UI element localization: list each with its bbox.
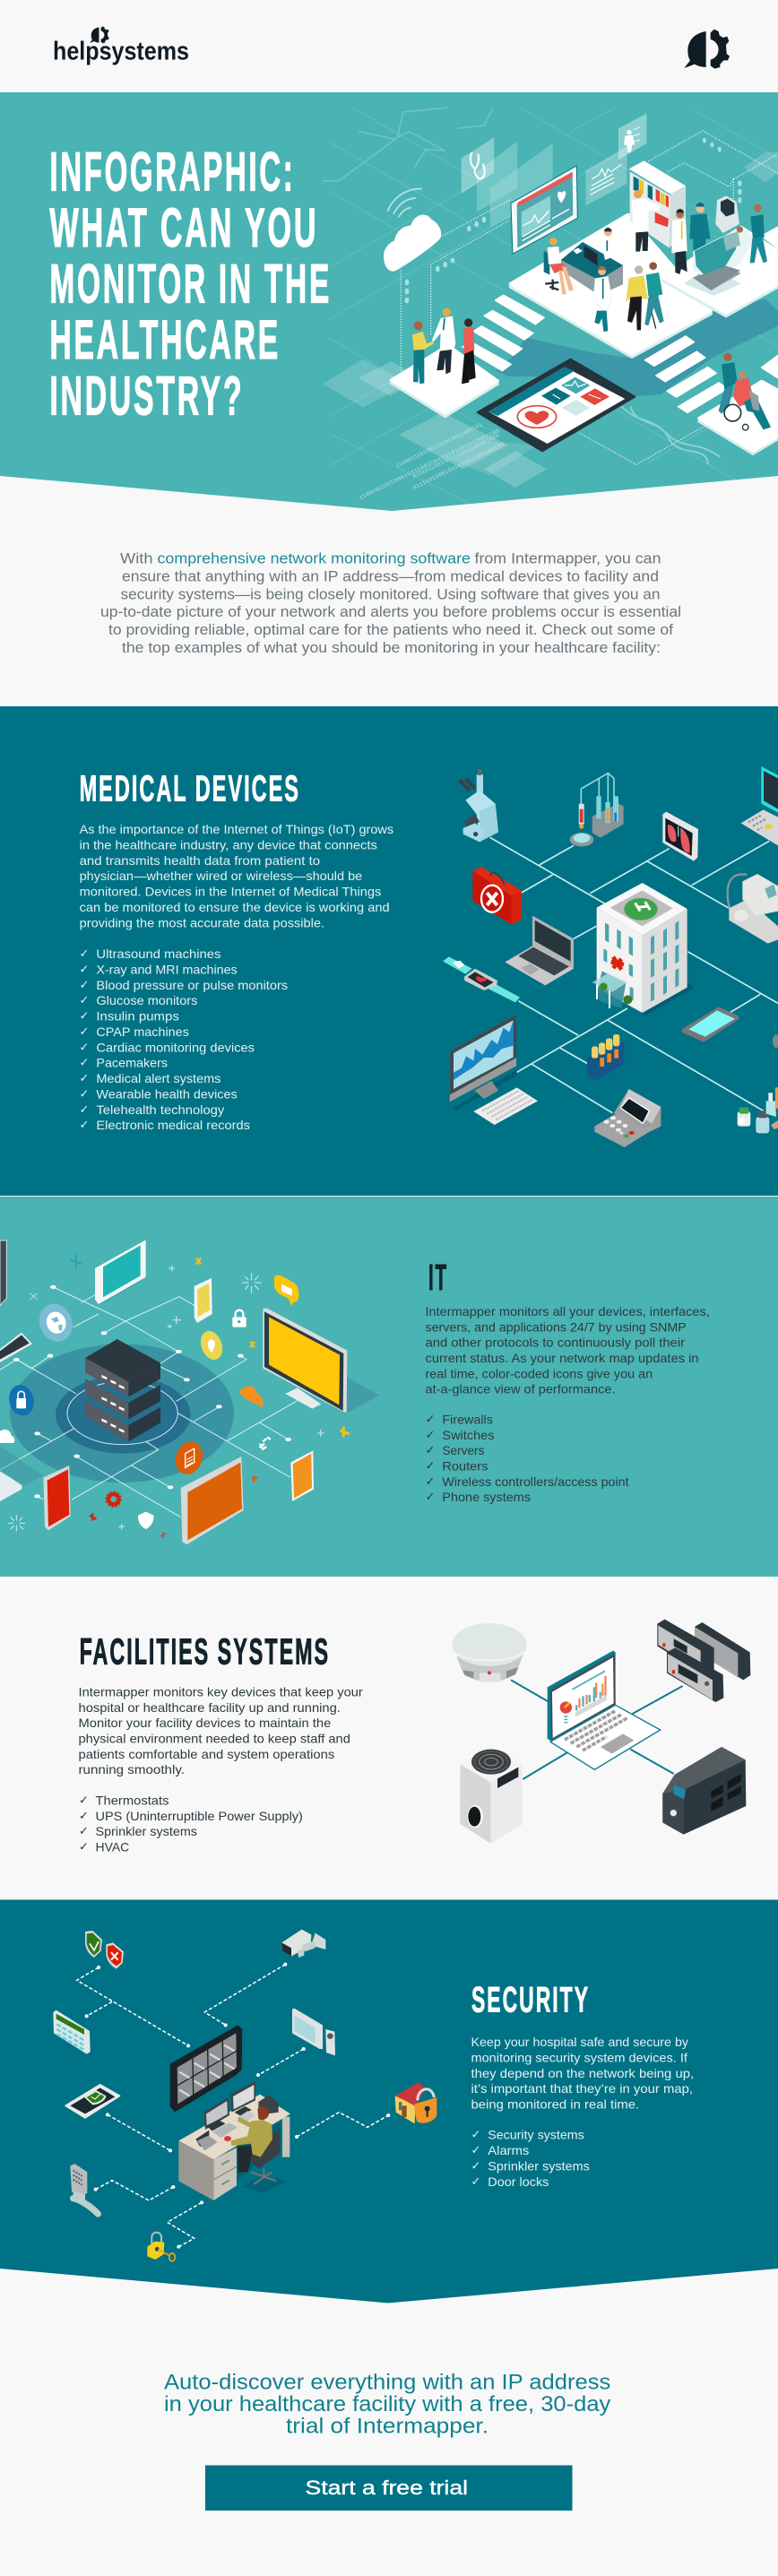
heading: IT: IT: [428, 1257, 448, 1298]
icon: laptop: [505, 916, 574, 985]
icon: mobile phone badge: [171, 1438, 207, 1478]
panel: medical devices: [0, 706, 778, 1196]
person: nurse right: [750, 204, 767, 263]
person in wheelchair: [724, 371, 771, 430]
icon: teal tablet: [95, 1240, 155, 1304]
text: IT description: [425, 1304, 710, 1396]
intro paragraph: [100, 550, 681, 656]
icon: chemistry flasks: [570, 774, 624, 846]
checklist: security: Sprinkler systems: [488, 2158, 590, 2173]
text: security description: monitoring security system devices. If: [471, 2050, 687, 2064]
icon: security camera: [281, 1930, 325, 1958]
checklist: medical devices: Medical alert systems: [96, 1071, 220, 1085]
checklist: medical devices: ✓: [79, 1087, 89, 1101]
checklist: security: ✓: [471, 2159, 480, 2173]
binary code strip: 1188811181081181018811881181: [395, 422, 483, 469]
checklist: medical devices: [79, 947, 288, 1132]
panel: security: [0, 1900, 778, 2304]
logo: helpsystems wordmark: [53, 26, 189, 66]
call to action text: trial of Intermapper.: [286, 2414, 488, 2438]
logo: helpsystems wordmark: helpsystems: [53, 38, 189, 66]
checklist: medical devices: Ultrasound machines: [96, 947, 220, 961]
intro paragraph: the top examples of what you should be monitoring in your healthcare facility:: [122, 640, 661, 656]
checklist: IT: Phone systems: [442, 1490, 531, 1504]
text: IT description: and other protocols to continuously poll their: [425, 1336, 685, 1350]
icon: keyboard: [0, 1333, 32, 1362]
patient bed and vitals monitor: [693, 195, 756, 290]
binary code strip: 8111181188101181081188188181: [412, 442, 506, 491]
icon: keyboard: [473, 1087, 538, 1125]
checklist: IT: Servers: [442, 1443, 484, 1457]
checklist: facilities: ✓: [79, 1794, 89, 1807]
checklist: medical devices: ✓: [79, 1103, 89, 1117]
checklist: medical devices: Wearable health devices: [96, 1086, 238, 1101]
checklist: security: Alarms: [488, 2143, 529, 2157]
checklist: facilities: HVAC: [95, 1839, 129, 1854]
call to action text: Auto-discover everything with an IP address: [164, 2370, 610, 2395]
person: doctor at shelf: [632, 190, 661, 252]
icon: test tube rack: [587, 1034, 625, 1081]
icon: air conditioning unit: [460, 1744, 523, 1844]
icon: cloud: [384, 215, 441, 272]
icon: microscope: [460, 769, 498, 842]
icon: orange small tablet: [290, 1450, 314, 1501]
checklist: facilities: ✓: [79, 1810, 89, 1823]
binary code strip: 11880810010881011188108101181181010881188: [359, 428, 500, 501]
text: medical devices description: and transmits health data from patient to: [80, 853, 320, 868]
text: facilities description: running smoothly.: [79, 1762, 185, 1776]
person: elderly man with walking frame: [626, 265, 656, 330]
checklist: IT: Routers: [442, 1459, 488, 1474]
checklist: medical devices: ✓: [79, 963, 89, 976]
icon: white cloud: [0, 1430, 14, 1443]
checklist: medical devices: ✓: [79, 1057, 89, 1070]
panel: IT: [0, 1197, 778, 1577]
binary code strip: [359, 422, 506, 501]
icon: ultrasound console: [741, 766, 778, 845]
text: facilities description: Intermapper monitors key devices that keep your: [79, 1685, 363, 1699]
dotted network connections: [401, 131, 778, 464]
binary code strip: 8111811881081011881081181888: [412, 433, 500, 480]
icon: globe badge: [34, 1299, 78, 1346]
crosswalk slabs: [462, 295, 727, 412]
text: medical devices description: As the importance of the Internet of Things (IoT) grows: [80, 822, 393, 836]
text: security description: they depend on the network being up,: [471, 2066, 694, 2080]
text: IT description: real time, color-coded icons give you an: [425, 1366, 653, 1380]
icon: door lock: [70, 2164, 98, 2214]
checklist: medical devices: Pacemakers: [96, 1056, 168, 1070]
tablet with health apps: [478, 359, 635, 451]
icon: security shield: [138, 1512, 154, 1529]
icon: video wall: [171, 2027, 241, 2111]
text: facilities description: [79, 1685, 363, 1776]
panel: hero banner: [0, 92, 778, 514]
heading: medical devices: MEDICAL DEVICES: [80, 768, 300, 809]
person: standing doctor with beard: [671, 209, 687, 274]
icon: laptop dashboard: [548, 1651, 661, 1769]
checklist: IT: [425, 1413, 629, 1504]
icon: sparkle burst: [8, 1274, 262, 1531]
icon: lock badge: [5, 1382, 38, 1419]
wifi signal: [388, 189, 421, 217]
icon: alarm keypad: [53, 2010, 91, 2054]
checklist: security: [471, 2128, 590, 2189]
icon: message bubble: [274, 1275, 298, 1306]
icon: orange cloud: [239, 1386, 264, 1407]
checklist: IT: ✓: [425, 1413, 435, 1427]
illustration: security operator connected to devices: [53, 1930, 437, 2261]
icon: chain link: [259, 1437, 271, 1449]
text: IT description: at-a-glance view of performance.: [425, 1382, 615, 1396]
icon: padlock: [232, 1310, 246, 1327]
icon: white laptop edge: [0, 1472, 22, 1501]
button: start a free trial: Start a free trial: [305, 2477, 468, 2499]
icon: laptop edge: [0, 1240, 6, 1306]
network rings: [10, 1344, 234, 1482]
text: facilities description: physical environment needed to keep staff and: [79, 1732, 350, 1746]
desk monitors and keyboards: [195, 2081, 279, 2150]
icon: desktop monitor with chart: [450, 1015, 517, 1110]
hero illustration: isometric hospital: [323, 108, 778, 511]
text: IT description: servers, and applications 24/7 by using SNMP: [425, 1319, 687, 1334]
person: doctor walking: [593, 266, 612, 332]
checklist: medical devices: ✓: [79, 1041, 89, 1054]
icon: padlock and key: [147, 2233, 175, 2261]
checklist: medical devices: ✓: [79, 994, 89, 1007]
white isometric platforms: [391, 214, 778, 454]
shelving unit with books: [629, 160, 686, 248]
title: INFOGRAPHIC:: [49, 142, 295, 203]
translucent data tiles: [323, 152, 778, 488]
icon: house with padlock: [395, 2082, 437, 2123]
checklist: medical devices: Telehealth technology: [96, 1102, 224, 1117]
checklist: medical devices: ✓: [79, 979, 89, 992]
intro paragraph: ensure that anything with an IP address—from medical devices to facility and: [122, 568, 659, 584]
checklist: medical devices: Glucose monitors: [96, 993, 197, 1007]
checklist: medical devices: ✓: [79, 1009, 89, 1024]
checklist: medical devices: CPAP machines: [96, 1024, 189, 1039]
text: security description: it’s important that they’re in your map,: [471, 2081, 693, 2096]
icon: shields: [85, 1931, 124, 1969]
icon: thermostats: [657, 1620, 750, 1702]
checklist: security: ✓: [471, 2144, 480, 2157]
text: medical devices description: physician—whether wired or wireless—should be: [80, 869, 362, 883]
text: security description: [471, 2035, 694, 2112]
illustration: IT network around server: [0, 1240, 379, 1544]
person: receptionist seated: [544, 238, 574, 294]
intro paragraph: security systems—is being closely monitored. Using software that gives you an: [120, 586, 660, 602]
text: medical devices description: can be monitored to ensure the device is working and: [80, 900, 390, 914]
checklist: facilities: ✓: [79, 1825, 89, 1838]
checklist: security: Security systems: [488, 2128, 584, 2142]
checklist: security: Door locks: [488, 2174, 549, 2189]
icon: x-ray lungs: [662, 812, 698, 861]
intro paragraph: to providing reliable, optimal care for the patients who need it. Check out some of: [108, 622, 673, 638]
person: doctor at desk: [604, 228, 612, 260]
icon: red first aid kit: [472, 867, 522, 925]
illustration: facility devices connected to laptop: [452, 1620, 750, 1844]
text: medical devices description: monitored. Devices in the Internet of Medical Things: [80, 884, 381, 898]
network lines: [0, 1287, 298, 1517]
checklist: medical devices: Blood pressure or pulse monitors: [96, 978, 288, 992]
checklist: medical devices: X-ray and MRI machines: [96, 962, 238, 976]
checklist: IT: Firewalls: [442, 1413, 493, 1427]
person: nurse helping: [644, 262, 664, 325]
operator desk: [178, 2095, 290, 2200]
checklist: facilities: Thermostats: [95, 1793, 169, 1807]
text: medical devices description: in the healthcare industry, any device that connects: [80, 837, 377, 851]
icon: red phone: [43, 1465, 71, 1530]
DNA strand: [621, 406, 720, 464]
icon: UPS power supply: [662, 1747, 746, 1835]
checklist: facilities: [79, 1793, 303, 1854]
icon: medicine bottles: [738, 1087, 778, 1133]
floor shadow between platforms: [496, 298, 778, 397]
intro paragraph: With: [120, 550, 152, 566]
icon: device at right edge: [773, 1034, 778, 1048]
reception desk: [561, 242, 623, 295]
icon: hospital building: [592, 883, 695, 1016]
icon: smart watch: [443, 956, 520, 1002]
dotted connections: [77, 1965, 388, 2247]
intro paragraph: up-to-date picture of your network and alerts you before problems occur is essential: [100, 604, 681, 620]
text: medical devices description: [80, 822, 393, 929]
icon: smartphone with shield: [65, 2085, 119, 2118]
small accent marks: [30, 1255, 350, 1538]
title: [49, 142, 332, 426]
checklist: security: ✓: [471, 2175, 480, 2189]
checklist: medical devices: ✓: [79, 1119, 89, 1132]
button: start a free trial: [205, 2465, 572, 2511]
title: INDUSTRY?: [49, 366, 244, 427]
checklist: medical devices: ✓: [79, 947, 89, 961]
icon: orange large tablet: [181, 1457, 244, 1544]
call to action text: [164, 2370, 610, 2438]
icon: smartphone: [682, 1007, 739, 1042]
panel: facilities systems: [79, 1620, 750, 1854]
call to action text: in your healthcare facility with a free, 30-day: [164, 2392, 610, 2416]
person: surgeon: [689, 203, 711, 253]
checklist: IT: ✓: [425, 1444, 435, 1457]
checklist: medical devices: Cardiac monitoring devices: [96, 1040, 255, 1054]
icon: yellow monitor: [263, 1308, 379, 1413]
icon: red gear: [106, 1491, 121, 1507]
person: security operator: [224, 2106, 280, 2184]
checklist: facilities: Sprinkler systems: [95, 1824, 197, 1838]
icon: yellow phone: [194, 1278, 212, 1323]
icon: video intercom: [292, 2009, 335, 2055]
intro paragraph: from Intermapper, you can: [475, 550, 661, 566]
illustration: connected medical devices around hospital: [443, 766, 778, 1147]
title: MONITOR IN THE: [49, 253, 332, 314]
checklist: IT: ✓: [425, 1429, 435, 1442]
title: HEALTHCARE: [49, 309, 281, 370]
text: IT description: Intermapper monitors all your devices, interfaces,: [425, 1304, 710, 1318]
people shaking hands: [412, 308, 476, 384]
checklist: IT: Switches: [442, 1428, 495, 1442]
person: nurse pushing wheelchair: [719, 353, 738, 414]
icon: eye examination machine: [728, 874, 778, 944]
logo: speech bubble and gear icon: [684, 30, 730, 69]
text: facilities description: patients comfortable and system operations: [79, 1747, 334, 1761]
text: IT description: current status. As your network map updates in: [425, 1351, 699, 1365]
icon: server stack: [85, 1339, 160, 1441]
checklist: IT: Wireless controllers/access point: [442, 1474, 629, 1489]
text: medical devices description: providing the most accurate data possible.: [80, 915, 324, 929]
title: WHAT CAN YOU: [49, 197, 318, 258]
icon: diagnostic machine: [594, 1089, 661, 1147]
dashboard monitor: [511, 166, 577, 254]
floating medical panels: [462, 114, 646, 227]
text: facilities description: hospital or healthcare facility up and running.: [79, 1700, 341, 1715]
checklist: medical devices: Insulin pumps: [96, 1009, 179, 1024]
text: security description: Keep your hospital safe and secure by: [471, 2035, 688, 2049]
text: facilities description: Monitor your facility devices to maintain the: [79, 1716, 332, 1730]
intro paragraph: comprehensive network monitoring software: [158, 550, 471, 566]
checklist: medical devices: ✓: [79, 1072, 89, 1085]
checklist: medical devices: Electronic medical records: [96, 1118, 250, 1132]
icon: location pin badge: [197, 1327, 226, 1363]
heading: facilities systems: FACILITIES SYSTEMS: [80, 1631, 330, 1673]
checklist: IT: ✓: [425, 1475, 435, 1489]
heading: security: SECURITY: [471, 1981, 590, 2020]
checklist: IT: ✓: [425, 1491, 435, 1504]
checklist: facilities: ✓: [79, 1841, 89, 1854]
checklist: medical devices: ✓: [79, 1025, 89, 1039]
checklist: IT: ✓: [425, 1459, 435, 1474]
text: security description: being monitored in real time.: [471, 2097, 639, 2112]
checklist: security: ✓: [471, 2129, 480, 2142]
checklist: facilities: UPS (Uninterruptible Power Supply): [95, 1809, 303, 1823]
icon: smoke detector: [452, 1623, 527, 1682]
